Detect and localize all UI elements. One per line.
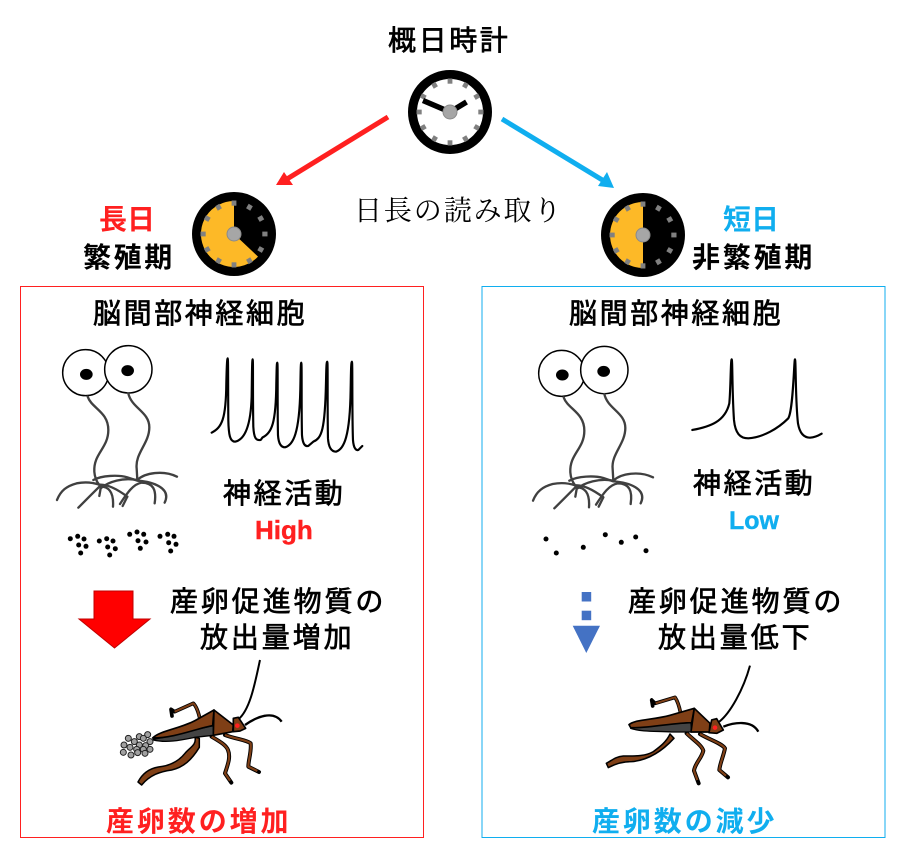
arrow: to short day <box>502 119 614 188</box>
heading: short day: 短日 <box>723 204 779 235</box>
label: pars intercerebralis neurons right: 脳間部神経細胞 <box>569 298 783 329</box>
dots: many secretory granules <box>68 530 178 558</box>
label: egg promoter release increases: 放出量増加 <box>200 622 355 653</box>
chart: high spike train <box>212 358 362 452</box>
panel: long day <box>20 286 424 838</box>
label: egg promoter release decreases: 産卵促進物質の <box>628 586 844 617</box>
icon: short day clock <box>601 193 685 277</box>
panel: short day <box>482 286 885 838</box>
label: neural activity left: 神経活動 <box>223 478 345 509</box>
label: egg promoter release decreases: 放出量低下 <box>658 622 813 653</box>
dots: few secretory granules <box>544 532 648 556</box>
heading: long day: 長日 <box>99 204 155 235</box>
arrow: red block arrow <box>79 591 150 648</box>
label: egg count decrease: 産卵数の減少 <box>592 806 777 837</box>
icon: insect <box>606 666 758 783</box>
label: high: High <box>255 515 313 545</box>
heading: breeding season: 繁殖期 <box>83 242 175 273</box>
label: day length reading: 日長の読み取り <box>354 195 563 227</box>
icon: insect with eggs <box>120 660 282 785</box>
arrow: blue dashed arrow <box>573 592 600 653</box>
icon: neurons right <box>533 346 653 508</box>
label: egg promoter release increases: 産卵促進物質の <box>170 586 386 617</box>
chart: low spike train <box>692 359 822 438</box>
label: low: Low <box>729 507 780 535</box>
label: neural activity right: 神経活動 <box>693 468 815 499</box>
icon: egg cluster <box>120 732 153 758</box>
icon: neurons left <box>57 346 177 508</box>
icon: long day clock <box>192 192 276 276</box>
label: pars intercerebralis neurons left: 脳間部神経細胞 <box>93 298 307 329</box>
title: circadian clock: 概日時計 <box>388 25 510 56</box>
label: egg count increase: 産卵数の増加 <box>106 806 291 837</box>
heading: non-breeding season: 非繁殖期 <box>692 242 815 273</box>
arrow: to long day <box>276 117 388 185</box>
icon: circadian clock <box>412 74 488 150</box>
